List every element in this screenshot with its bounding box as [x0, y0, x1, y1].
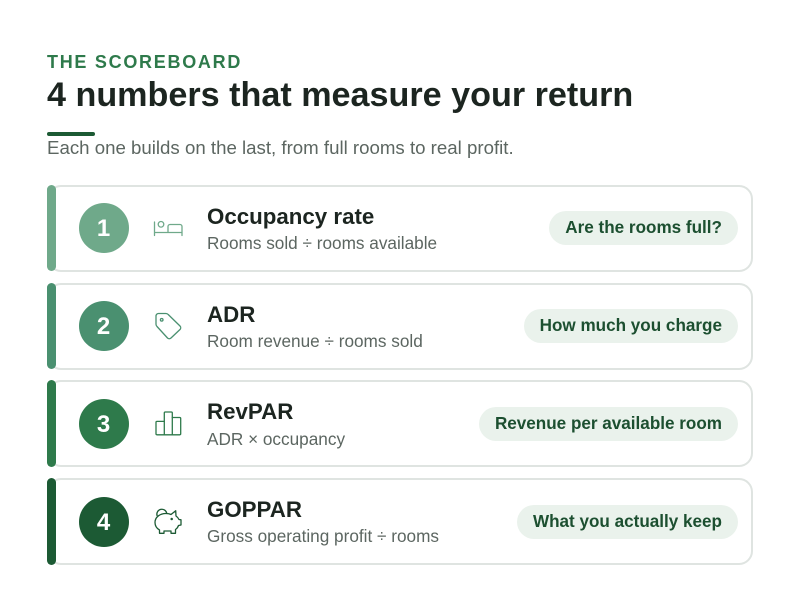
question pill: [517, 504, 738, 538]
number badge 1: 1: [97, 215, 110, 242]
formula: ADR × occupancy: [207, 428, 345, 448]
icon: bar chart: [155, 411, 182, 436]
panel: GOPPAR: [47, 478, 753, 565]
question pill: Are the rooms full?: [565, 218, 722, 237]
number badge 3: [78, 399, 128, 449]
number badge 2: 2: [97, 313, 110, 340]
question pill: [524, 309, 738, 343]
accent rule: [47, 132, 95, 136]
metric name: GOPPAR: [207, 497, 302, 522]
icon: piggy bank: [154, 508, 182, 534]
title: 4 numbers that measure your return: [47, 76, 633, 114]
panel: RevPAR: [47, 380, 753, 467]
metric name: ADR: [207, 302, 255, 326]
question pill: How much you charge: [540, 316, 722, 335]
metric name: Occupancy rate: [207, 204, 374, 229]
number badge 1: [78, 203, 128, 253]
eyebrow: THE SCOREBOARD: [47, 52, 242, 72]
icon: bed: [154, 220, 183, 236]
question pill: [479, 407, 738, 441]
number badge 4: 4: [97, 508, 110, 536]
number badge 2: [78, 301, 128, 351]
question pill: Revenue per available room: [495, 414, 722, 433]
panel: occupancy rate: [47, 185, 753, 272]
formula: Room revenue ÷ rooms sold: [207, 331, 423, 351]
number badge 4: [78, 496, 128, 546]
subtitle: Each one builds on the last, from full rooms to real profit.: [47, 137, 514, 158]
icon: price tag: [155, 312, 182, 340]
formula: Rooms sold ÷ rooms available: [207, 233, 437, 253]
panel: ADR: [47, 283, 753, 370]
metric name: RevPAR: [207, 399, 293, 424]
question pill: [549, 211, 738, 245]
question pill: What you actually keep: [533, 512, 722, 530]
number badge 3: 3: [97, 411, 110, 438]
formula: Gross operating profit ÷ rooms: [207, 526, 439, 546]
